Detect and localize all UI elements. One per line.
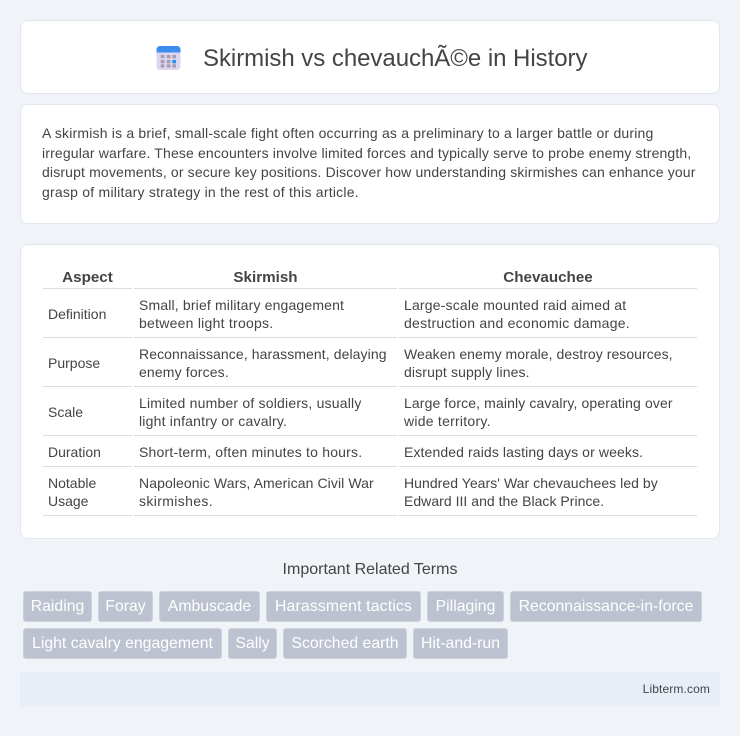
comparison table panel [20, 244, 720, 539]
intro text: disrupt movements, or secure key positions. Discover how understanding skirmishes can enhance your [42, 164, 696, 180]
tag: Light cavalry engagement: Light cavalry engagement [32, 635, 213, 652]
Chevauchee scale: Large force, mainly cavalry, operating over [404, 395, 673, 411]
Skirmish definition: Small, brief military engagement [139, 297, 344, 313]
tag: Sally: Sally [235, 635, 270, 652]
intro text: A skirmish is a brief, small-scale fight often occurring as a preliminary to a larger battle or during [42, 125, 654, 141]
Chevauchee scale: wide territory. [404, 413, 491, 429]
related term tags [23, 591, 702, 659]
tag: Reconnaissance-in-force [510, 591, 702, 622]
Chevauchee definition: destruction and economic damage. [404, 315, 630, 331]
tag: Ambuscade [159, 591, 260, 622]
Skirmish scale [139, 395, 362, 429]
tag: Reconnaissance-in-force: Reconnaissance-in-force [519, 598, 693, 615]
Skirmish definition: between light troops. [139, 315, 273, 331]
column header: Aspect: Aspect [62, 269, 113, 286]
tag: Pillaging: Pillaging [436, 598, 495, 615]
tag: Light cavalry engagement [23, 628, 222, 659]
Skirmish usage: skirmishes. [139, 493, 213, 509]
row: Duration: Duration [48, 444, 101, 460]
row: Purpose: Purpose [48, 355, 100, 371]
Chevauchee usage [404, 475, 658, 509]
intro text [42, 125, 696, 200]
tag: Raiding: Raiding [31, 598, 84, 615]
Chevauchee purpose: Weaken enemy morale, destroy resources, [404, 346, 673, 362]
Chevauchee purpose [404, 346, 673, 380]
intro text: grasp of military strategy in the rest of this article. [42, 184, 359, 200]
tag: Hit-and-run [413, 628, 508, 659]
row: Scale: Scale [48, 404, 83, 420]
Skirmish scale: light infantry or cavalry. [139, 413, 287, 429]
header panel [20, 20, 720, 94]
Chevauchee usage: Hundred Years' War chevauchees led by [404, 475, 658, 491]
Skirmish duration: Short-term, often minutes to hours. [139, 444, 362, 460]
Chevauchee definition [404, 297, 630, 331]
Chevauchee duration: Extended raids lasting days or weeks. [404, 444, 643, 460]
icon: calendar [156, 46, 180, 70]
Skirmish scale: Limited number of soldiers, usually [139, 395, 362, 411]
Skirmish purpose: Reconnaissance, harassment, delaying [139, 346, 387, 362]
row: Notable Usage [48, 475, 96, 509]
Chevauchee purpose: disrupt supply lines. [404, 364, 530, 380]
related terms heading: Important Related Terms [283, 561, 457, 578]
tag: Foray [98, 591, 153, 622]
tag: Harassment tactics: Harassment tactics [275, 598, 412, 615]
Skirmish usage [139, 475, 374, 509]
row: Notable Usage: Notable [48, 475, 96, 491]
tag: Pillaging [427, 591, 504, 622]
Skirmish purpose [139, 346, 387, 380]
Chevauchee scale [404, 395, 673, 429]
Skirmish definition [139, 297, 344, 331]
column header: Skirmish: Skirmish [233, 269, 298, 286]
row: Notable Usage: Usage [48, 493, 88, 509]
intro panel [20, 104, 720, 224]
tag: Scorched earth: Scorched earth [291, 635, 399, 652]
tag: Scorched earth [283, 628, 407, 659]
tag: Foray: Foray [105, 598, 146, 615]
Chevauchee usage: Edward III and the Black Prince. [404, 493, 604, 509]
tag: Raiding [23, 591, 92, 622]
Skirmish purpose: enemy forces. [139, 364, 229, 380]
Skirmish usage: Napoleonic Wars, American Civil War [139, 475, 374, 491]
tag: Ambuscade: Ambuscade [168, 598, 251, 615]
tag: Sally [228, 628, 277, 659]
footer credit: Libterm.com [643, 682, 710, 696]
Chevauchee definition: Large-scale mounted raid aimed at [404, 297, 626, 313]
column header: Chevauchee: Chevauchee [503, 269, 593, 286]
intro text: irregular warfare. These encounters involve limited forces and typically serve to probe enemy strength, [42, 145, 691, 161]
tag: Harassment tactics [266, 591, 421, 622]
title: Skirmish vs chevauchÃ©e in History [203, 45, 587, 72]
footer bar [20, 672, 720, 706]
row: Definition: Definition [48, 306, 106, 322]
tag: Hit-and-run: Hit-and-run [421, 635, 500, 652]
